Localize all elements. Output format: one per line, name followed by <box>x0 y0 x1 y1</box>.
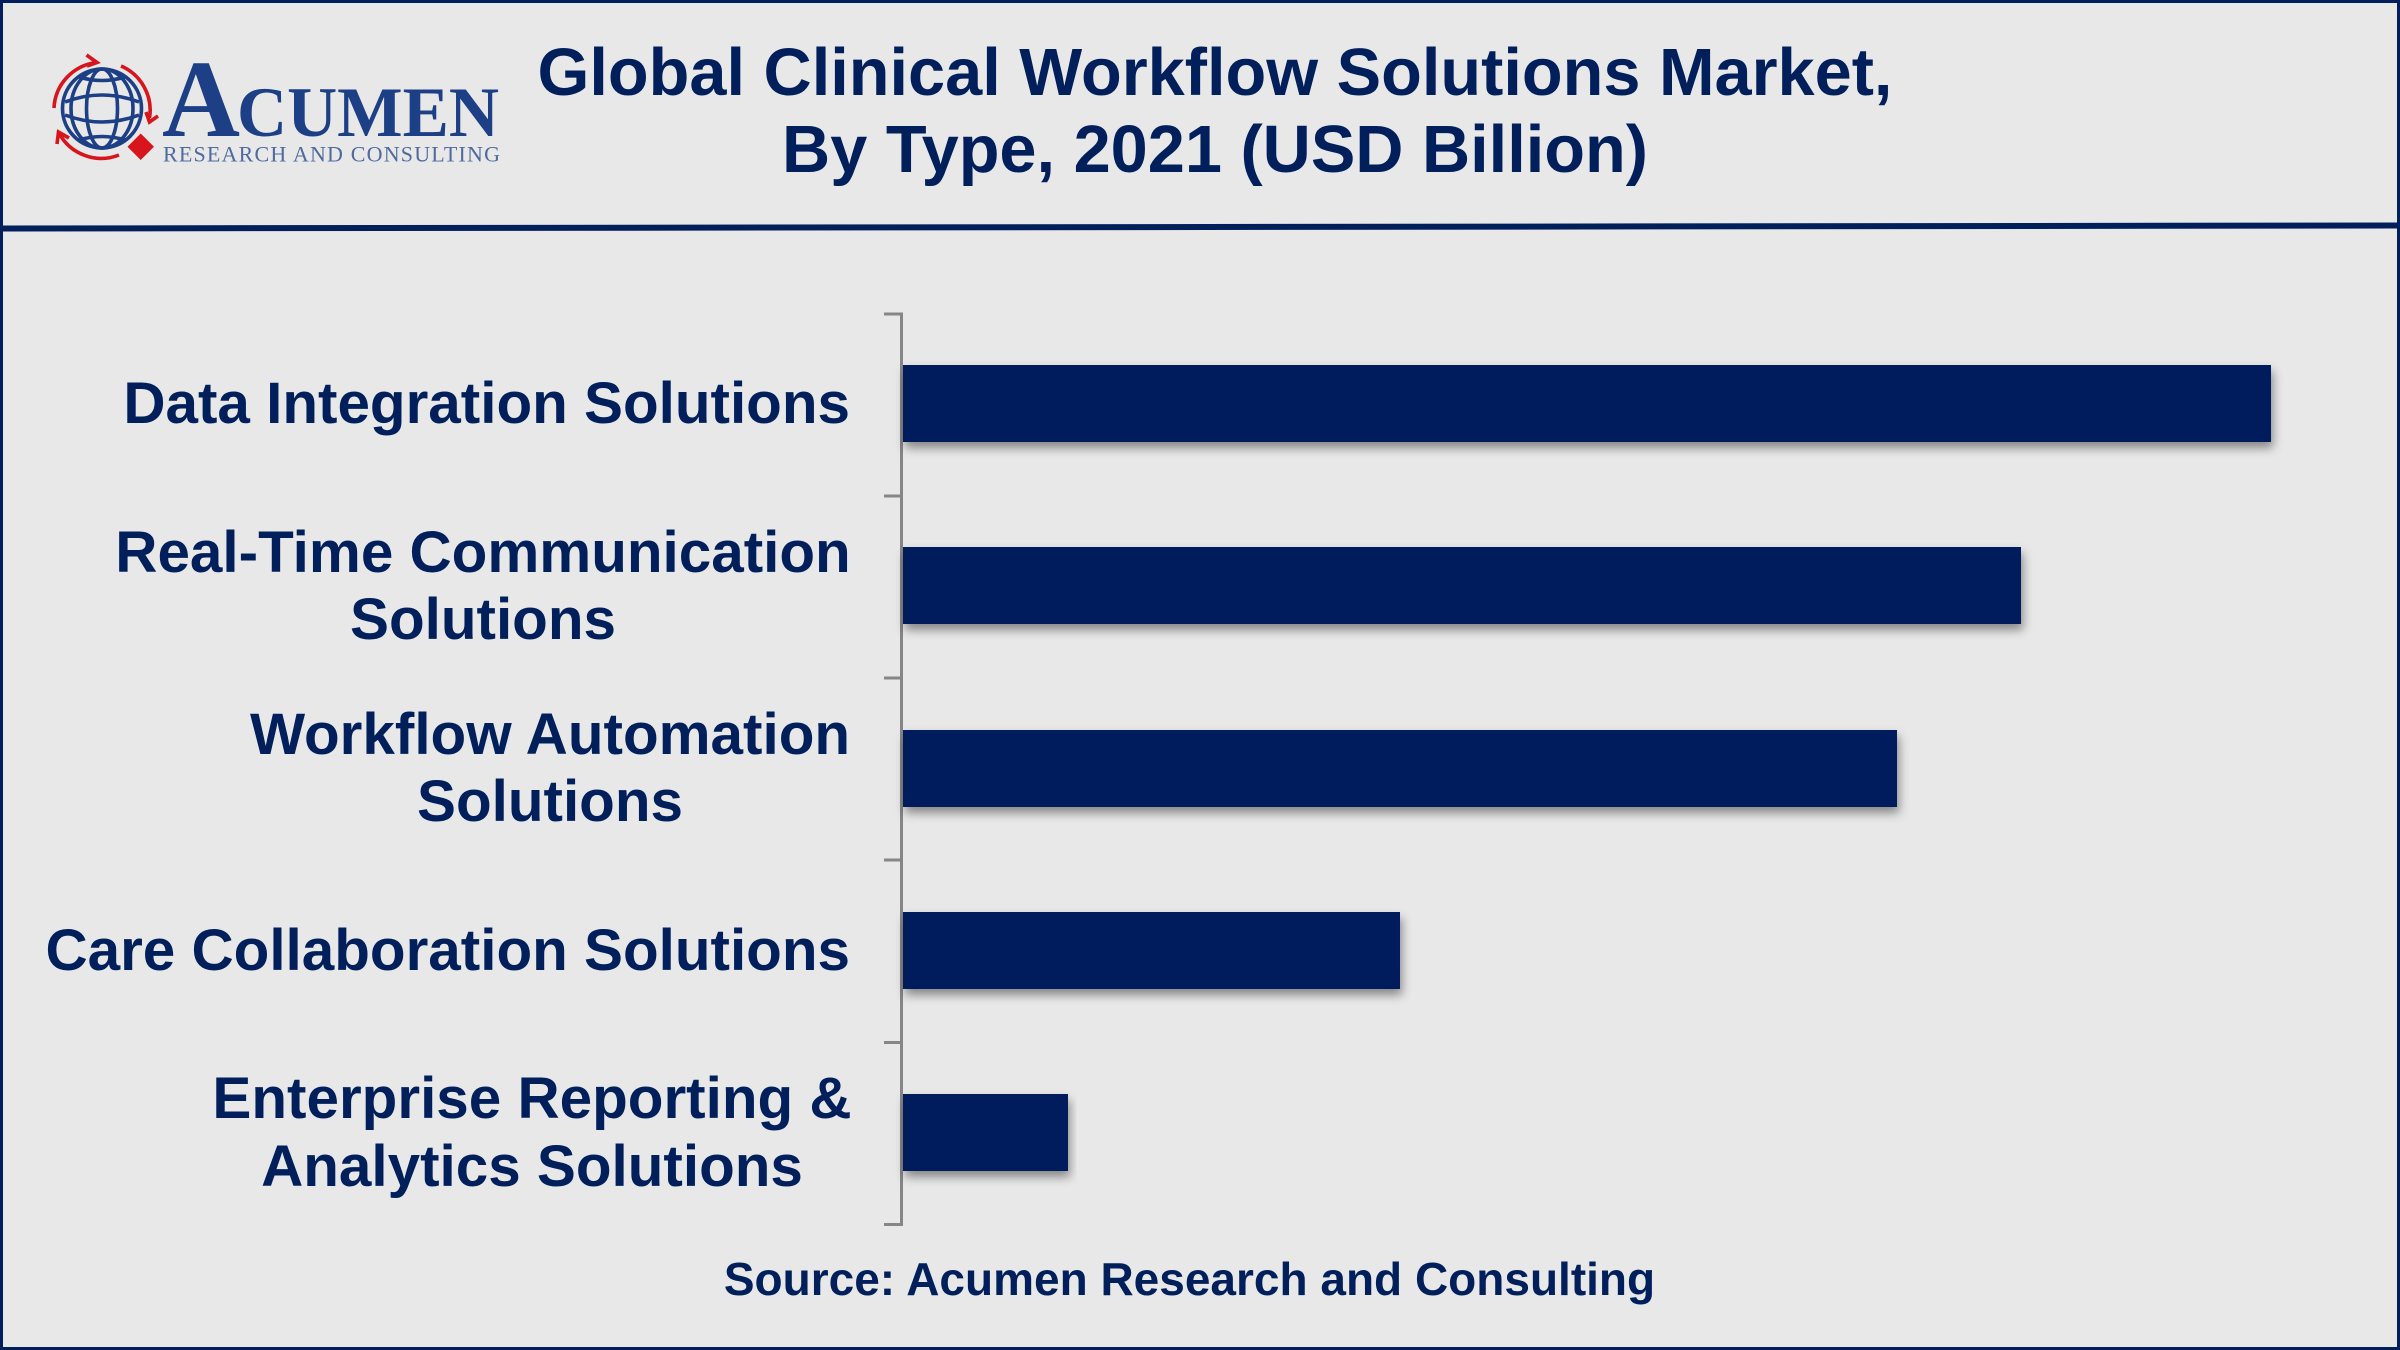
label: Real-Time Communication Solutions <box>115 520 851 652</box>
logo: Acumen Research and Consulting <box>54 38 500 166</box>
icon: red cycle arrows and diamond <box>54 55 158 160</box>
title: Global Clinical Workflow Solutions Market, <box>538 36 1892 110</box>
label: Workflow Automation Solutions: Workflow Automation <box>250 702 850 767</box>
label: Enterprise Reporting & Analytics Solutions <box>212 1066 852 1199</box>
bar: Data Integration Solutions <box>903 365 2271 442</box>
label: Real-Time Communication Solutions: Real-Time Communication <box>115 520 851 585</box>
source note: Source: Acumen Research and Consulting <box>724 1253 1655 1305</box>
label: Workflow Automation Solutions: Solutions <box>417 769 683 834</box>
bar: Real-Time Communication Solutions <box>903 547 2021 624</box>
title <box>538 36 1892 187</box>
icon: globe <box>62 69 142 148</box>
category labels <box>45 371 852 1199</box>
title: By Type, 2021 (USD Billion) <box>782 113 1648 187</box>
label: Enterprise Reporting & Analytics Solutions: Analytics Solutions <box>261 1134 803 1199</box>
bars <box>903 365 2271 1171</box>
logo wordmark: A <box>162 38 240 160</box>
logo tagline: RESEARCH AND CONSULTING <box>163 142 500 166</box>
label: Enterprise Reporting & Analytics Solutions: Enterprise Reporting & <box>212 1066 852 1131</box>
label: Data Integration Solutions: Data Integration Solutions <box>123 371 850 436</box>
logo: Acumen Research and Consulting: CUMEN <box>237 74 499 152</box>
axis <box>884 314 902 1224</box>
bar: Workflow Automation Solutions <box>903 730 1897 807</box>
header divider <box>2 226 2398 228</box>
bar: Care Collaboration Solutions <box>903 912 1400 989</box>
label: Care Collaboration Solutions: Care Collaboration Solutions <box>45 918 850 983</box>
bar chart <box>45 314 2271 1224</box>
bar: Enterprise Reporting & Analytics Solutions <box>903 1094 1068 1171</box>
label: Real-Time Communication Solutions: Solutions <box>350 587 616 652</box>
label: Workflow Automation Solutions <box>250 702 850 834</box>
